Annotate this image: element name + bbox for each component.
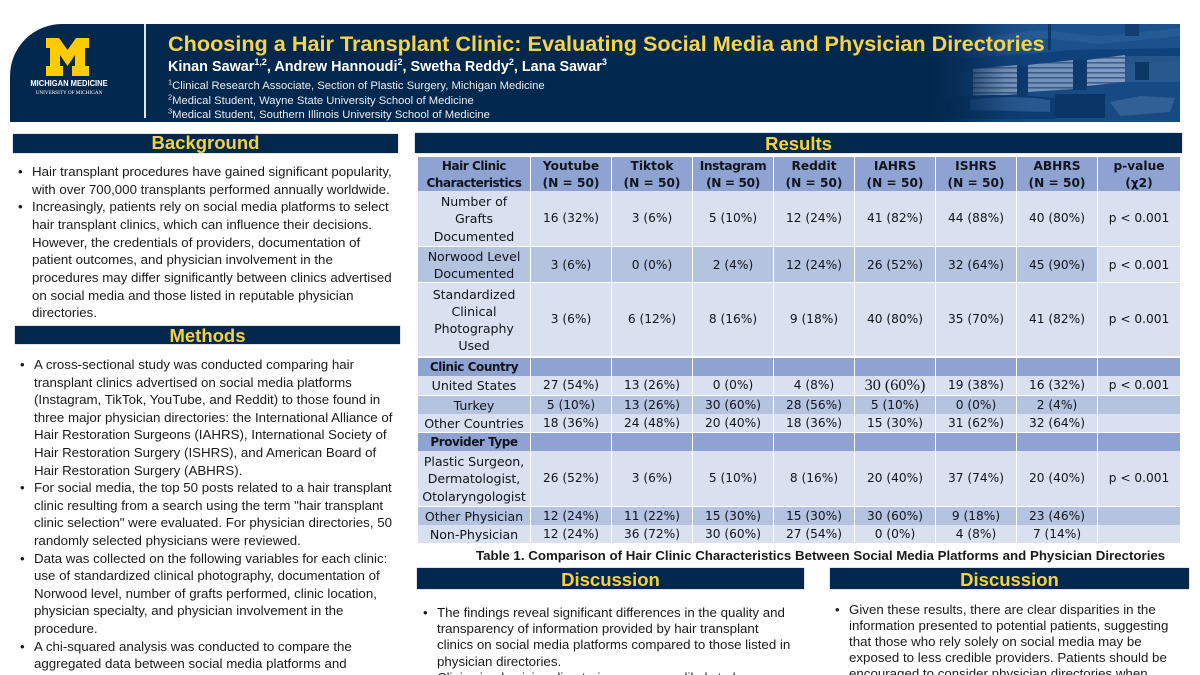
row: non-physician <box>418 525 1180 543</box>
row: number of grafts: Number of <box>441 194 507 209</box>
row: norwood level: Norwood Level <box>428 249 520 264</box>
title: Choosing a Hair Transplant Clinic: Evaluating Social Media and Physician Directories <box>168 31 1045 56</box>
text block: methods bullets: A cross-sectional study was conducted comparing hair <box>34 357 354 372</box>
text block: methods bullets: use of standardized clinical photography, documentation of <box>34 568 380 583</box>
heading: Results <box>415 133 1182 153</box>
row: number of grafts: 16 (32%) <box>543 211 599 225</box>
text block: methods bullets: procedure. <box>34 621 98 636</box>
row: norwood level: 0 (0%) <box>632 258 672 272</box>
row: number of grafts: 5 (10%) <box>709 211 757 225</box>
text block: discussion right: Given these results, there are clear disparities in the <box>849 602 1156 617</box>
row: other countries: 20 (40%) <box>705 416 761 430</box>
row: other countries: 32 (64%) <box>1029 416 1085 430</box>
row: other physician: 15 (30%) <box>705 509 761 523</box>
text block: methods bullets: three major physician directories: the International Alliance of <box>34 410 392 425</box>
row: Turkey: 13 (26%) <box>624 398 680 412</box>
text block: methods bullets: A chi-squared analysis was conducted to compare the <box>34 638 352 654</box>
table header row: (N = 50) <box>1028 176 1086 190</box>
row: other countries: 18 (36%) <box>543 416 599 430</box>
row: plastic surgeon: 5 (10%) <box>709 471 757 485</box>
text: • <box>423 605 428 620</box>
table header row: (N = 50) <box>624 176 680 190</box>
row: plastic surgeon: 26 (52%) <box>543 471 599 485</box>
row: number of grafts <box>418 191 1180 246</box>
row: other physician: 11 (22%) <box>624 509 680 523</box>
row: non-physician: 12 (24%) <box>543 527 599 541</box>
row: plastic surgeon: 3 (6%) <box>632 471 672 485</box>
row: plastic surgeon: Plastic Surgeon, <box>424 454 524 469</box>
row: Turkey: Turkey <box>454 398 494 413</box>
table header row: Tiktok <box>631 159 673 173</box>
text: • <box>20 638 25 654</box>
row: non-physician: 7 (14%) <box>1033 527 1081 541</box>
text block: background bullets <box>18 164 392 320</box>
heading: Background <box>13 134 398 153</box>
row: standardized photography: 8 (16%) <box>709 312 757 326</box>
table header row: (N = 50) <box>948 176 1004 190</box>
row: norwood level: 45 (90%) <box>1029 258 1085 272</box>
row: plastic surgeon: 20 (40%) <box>867 471 923 485</box>
vertical divider <box>144 24 146 118</box>
text block: methods bullets: For social media, the top 50 posts related to a hair transplant <box>34 480 392 495</box>
row: United States: 27 (54%) <box>543 378 599 392</box>
table header row: (χ2) <box>1125 176 1153 190</box>
text block: background bullets: on social media and those listed in reputable physician <box>32 288 354 303</box>
row: clinic country heading <box>418 358 1180 376</box>
text: • <box>18 199 23 214</box>
table header row: (N = 50) <box>706 176 760 190</box>
row: number of grafts: 12 (24%) <box>786 211 842 225</box>
text block: methods bullets: randomly selected physicians were reviewed. <box>34 533 301 548</box>
row: norwood level: 2 (4%) <box>713 258 753 272</box>
row: plastic surgeon: 37 (74%) <box>948 471 1004 485</box>
row: norwood level: 26 (52%) <box>867 258 923 272</box>
row: Turkey <box>418 396 1180 414</box>
affiliations: 1Clinical Research Associate, Section of Plastic Surgery, Michigan Medicine <box>168 77 545 92</box>
row: United States: 30 (60%) <box>865 376 925 394</box>
text block: methods bullets: Hair Restoration Surgery (ABHRS). <box>34 463 242 478</box>
row: plastic surgeon: 20 (40%) <box>1029 471 1085 485</box>
text block: discussion right: that those who rely solely on social media may be <box>849 634 1142 649</box>
row: norwood level <box>418 247 1180 282</box>
row: number of grafts: 44 (88%) <box>948 211 1004 225</box>
text block: discussion right: exposed to less credible providers. Patients should be <box>849 650 1167 665</box>
text block: methods bullets <box>20 357 392 671</box>
row: other countries: 15 (30%) <box>867 416 923 430</box>
row: United States: 4 (8%) <box>794 378 834 392</box>
row: Turkey: 0 (0%) <box>956 398 996 412</box>
row: standardized photography: Standardized <box>433 287 515 302</box>
heading: Discussion right <box>830 568 1189 589</box>
row: norwood level: 3 (6%) <box>551 258 591 272</box>
heading: Discussion left: Discussion <box>561 569 660 590</box>
row: other physician <box>418 507 1180 525</box>
table header row: Instagram <box>700 159 766 173</box>
row: number of grafts: 3 (6%) <box>632 211 672 225</box>
heading: Results: Results <box>765 133 832 154</box>
table header row: ISHRS <box>955 159 997 173</box>
text block: methods bullets: Norwood level, number of grafts performed, clinic location, <box>34 586 377 601</box>
row: number of grafts: Documented <box>434 229 514 244</box>
text block: background bullets: with over 700,000 transplants performed annually worldwide. <box>32 182 390 197</box>
row: non-physician: 30 (60%) <box>705 527 761 541</box>
row: non-physician: Non-Physician <box>430 527 518 542</box>
row: standardized photography: Clinical <box>451 304 496 319</box>
text: • <box>20 551 25 566</box>
text: • <box>20 480 25 495</box>
text: • <box>18 164 23 179</box>
row: United States: 16 (32%) <box>1029 378 1085 392</box>
text block: discussion left: physician directories. <box>437 654 561 669</box>
row: provider type heading <box>418 433 1180 451</box>
logo subtitle: UNIVERSITY OF MICHIGAN <box>36 90 102 96</box>
text block: discussion left <box>423 605 790 675</box>
row: United States <box>418 376 1180 395</box>
row: plastic surgeon: 8 (16%) <box>790 471 838 485</box>
text block: methods bullets: transplant clinics advertised on social media platforms <box>34 375 352 390</box>
header photo: hospital aerial view <box>950 24 1180 122</box>
affiliations <box>168 77 545 121</box>
heading: Background: Background <box>152 132 259 153</box>
row: United States: 13 (26%) <box>624 378 680 392</box>
text block: methods bullets: (Instagram, TikTok, YouTube, and Reddit) to those found in <box>34 392 380 407</box>
row: United States: 0 (0%) <box>713 378 753 392</box>
row: Turkey: 5 (10%) <box>547 398 595 412</box>
affiliations: 3Medical Student, Southern Illinois University School of Medicine <box>168 107 490 121</box>
text block: methods bullets: clinic selection" were evaluated. For physician directories, 50 <box>34 515 392 530</box>
row: provider type heading: Provider Type <box>430 435 518 449</box>
row: Turkey: 5 (10%) <box>871 398 919 412</box>
row: standardized photography: 41 (82%) <box>1029 312 1085 326</box>
text block: methods bullets: Hair Restoration Surgeons (IAHRS), International Society of <box>34 427 387 442</box>
text block: background bullets: Hair transplant procedures have gained significant popularity, <box>32 164 392 179</box>
row: non-physician: 27 (54%) <box>786 527 842 541</box>
row: standardized photography: Used <box>458 338 490 353</box>
row: standardized photography: 9 (18%) <box>790 312 838 326</box>
row: plastic surgeon <box>418 451 1180 506</box>
row: norwood level: Documented <box>434 266 514 281</box>
row: Turkey: 28 (56%) <box>786 398 842 412</box>
row: United States: United States <box>432 378 516 393</box>
row: other physician: Other Physician <box>425 509 523 524</box>
row: other physician: 30 (60%) <box>867 509 923 523</box>
row: plastic surgeon: Otolaryngologist <box>422 489 526 504</box>
row: number of grafts: p < 0.001 <box>1109 211 1169 225</box>
row: United States: 19 (38%) <box>948 378 1004 392</box>
row: other physician: 23 (46%) <box>1029 509 1085 523</box>
text block: discussion left: The findings reveal significant differences in the quality and <box>437 605 785 620</box>
table header row <box>418 157 1180 191</box>
row: non-physician: 0 (0%) <box>875 527 915 541</box>
row: standardized photography <box>418 283 1180 356</box>
row: non-physician: 4 (8%) <box>956 527 996 541</box>
table header row: Youtube <box>543 159 599 173</box>
logo wordmark: MICHIGAN MEDICINE <box>30 78 108 88</box>
text: • <box>20 357 25 372</box>
row: number of grafts: 40 (80%) <box>1029 211 1085 225</box>
text block: background bullets: However, the credentials of providers, documentation of <box>32 235 360 250</box>
header banner <box>10 24 1180 122</box>
row: other countries: 31 (62%) <box>948 416 1004 430</box>
heading: Methods <box>15 326 400 344</box>
row: standardized photography: 6 (12%) <box>628 312 676 326</box>
affiliations: 2Medical Student, Wayne State University School of Medicine <box>168 92 474 107</box>
table header row: p-value <box>1113 159 1165 173</box>
heading: Discussion right: Discussion <box>960 569 1059 590</box>
text block: background bullets: patient outcomes, and physician involvement in the <box>32 252 333 267</box>
row: standardized photography: 40 (80%) <box>867 312 923 326</box>
text block: discussion right <box>835 602 1168 675</box>
row: number of grafts: 41 (82%) <box>867 211 923 225</box>
row: other countries: 18 (36%) <box>786 416 842 430</box>
heading: Methods: Methods <box>169 325 246 346</box>
text block: methods bullets: clinic resulting from a search using the term "hair transplant <box>34 498 383 513</box>
row: plastic surgeon: p < 0.001 <box>1109 471 1169 485</box>
text block: discussion right: information presented to potential patients, suggesting <box>849 618 1168 633</box>
logo: Michigan Medicine <box>30 38 108 96</box>
text block: discussion left: transparency of information provided by hair transplant <box>437 621 759 636</box>
row: clinic country heading: Clinic Country <box>430 360 518 374</box>
text block: methods bullets: Data was collected on the following variables for each clinic: <box>34 551 387 566</box>
text block: methods bullets: aggregated data between social media platforms and <box>34 656 347 671</box>
text block: background bullets: Increasingly, patients rely on social media platforms to select <box>32 199 389 214</box>
row: other countries: Other Countries <box>424 416 524 431</box>
table caption: Table 1. Comparison of Hair Clinic Characteristics Between Social Media Platforms and Physician Directories <box>476 548 1165 563</box>
table header row: ABHRS <box>1033 159 1081 173</box>
row: norwood level: 12 (24%) <box>786 258 842 272</box>
row: plastic surgeon: Dermatologist, <box>428 471 520 486</box>
row: non-physician: 36 (72%) <box>624 527 680 541</box>
row: other physician: 9 (18%) <box>952 509 1000 523</box>
row: standardized photography: Photography <box>434 321 514 336</box>
row: Turkey: 2 (4%) <box>1037 398 1077 412</box>
text block: background bullets: directories. <box>32 305 97 320</box>
text block: discussion left: clinics on social media platforms compared to those listed in <box>437 637 790 652</box>
text: • <box>835 602 840 617</box>
row: number of grafts: Grafts <box>455 211 493 226</box>
row: norwood level: p < 0.001 <box>1109 258 1169 272</box>
text block: background bullets: hair transplant clinics, which can influence their decisions. <box>32 217 372 232</box>
row: other physician: 15 (30%) <box>786 509 842 523</box>
heading: Discussion left <box>417 568 804 589</box>
row: standardized photography: 3 (6%) <box>551 312 591 326</box>
row: standardized photography: 35 (70%) <box>948 312 1004 326</box>
text block: methods bullets: physician specialty, and physician involvement in the <box>34 603 343 618</box>
row: standardized photography: p < 0.001 <box>1109 312 1169 326</box>
table header row: Reddit <box>791 159 837 173</box>
text block: background bullets: procedures may differ significantly between clinics advertised <box>32 270 392 285</box>
table header row: (N = 50) <box>542 176 600 190</box>
authors: Kinan Sawar1,2, Andrew Hannoudi2, Swetha Reddy2, Lana Sawar3 <box>168 57 607 75</box>
row: United States: p < 0.001 <box>1109 378 1169 392</box>
row: other countries: 24 (48%) <box>624 416 680 430</box>
row: Turkey: 30 (60%) <box>705 398 761 412</box>
table header row: Hair Clinic <box>442 159 506 173</box>
table header row: (N = 50) <box>786 176 842 190</box>
table header row: Characteristics <box>426 176 521 190</box>
icon: block M <box>46 38 89 76</box>
table header row: IAHRS <box>874 159 916 173</box>
text block: methods bullets: Hair Restoration Surgery (ISHRS), and American Board of <box>34 445 376 460</box>
table: hair clinic characteristics <box>418 157 1180 543</box>
table header row: (N = 50) <box>866 176 924 190</box>
row: norwood level: 32 (64%) <box>948 258 1004 272</box>
row: other countries <box>418 414 1180 432</box>
row: other physician: 12 (24%) <box>543 509 599 523</box>
